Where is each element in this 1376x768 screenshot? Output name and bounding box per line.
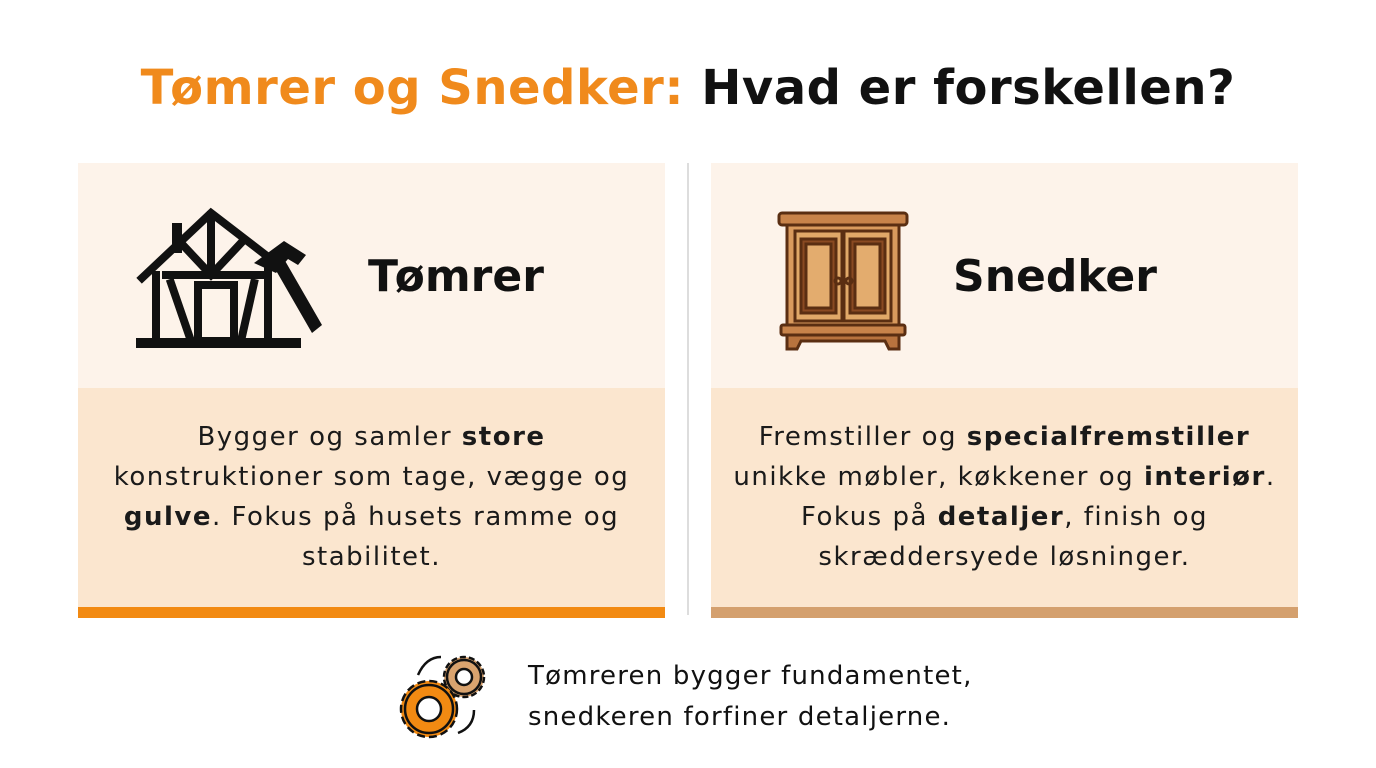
panel: tømrer bbox=[78, 163, 665, 618]
icon: gears bbox=[400, 656, 486, 738]
text block: gulve. Fokus på husets ramme og bbox=[124, 502, 619, 532]
text block: Fokus på detaljer, finish og bbox=[801, 502, 1208, 532]
text block: skræddersyede løsninger. bbox=[818, 542, 1191, 572]
text block: Bygger og samler store bbox=[197, 422, 546, 452]
text block: unikke møbler, køkkener og interiør. bbox=[733, 462, 1276, 492]
panel: snedker bbox=[711, 163, 1298, 618]
text block bbox=[733, 422, 1276, 572]
heading: Snedker bbox=[953, 251, 1157, 302]
footer text: Tømreren bygger fundamentet, bbox=[528, 661, 973, 691]
heading: Tømrer bbox=[368, 251, 544, 302]
icon: wooden cabinet bbox=[778, 212, 908, 350]
footer text bbox=[528, 661, 973, 732]
icon: house frame with hammer bbox=[136, 208, 322, 348]
footer text: snedkeren forfiner detaljerne. bbox=[528, 702, 951, 732]
title: Tømrer og Snedker: Hvad er forskellen? bbox=[141, 60, 1235, 116]
text block: Fremstiller og specialfremstiller bbox=[759, 422, 1250, 452]
text block: stabilitet. bbox=[302, 542, 441, 572]
text block bbox=[114, 422, 629, 572]
text block: konstruktioner som tage, vægge og bbox=[114, 462, 629, 492]
